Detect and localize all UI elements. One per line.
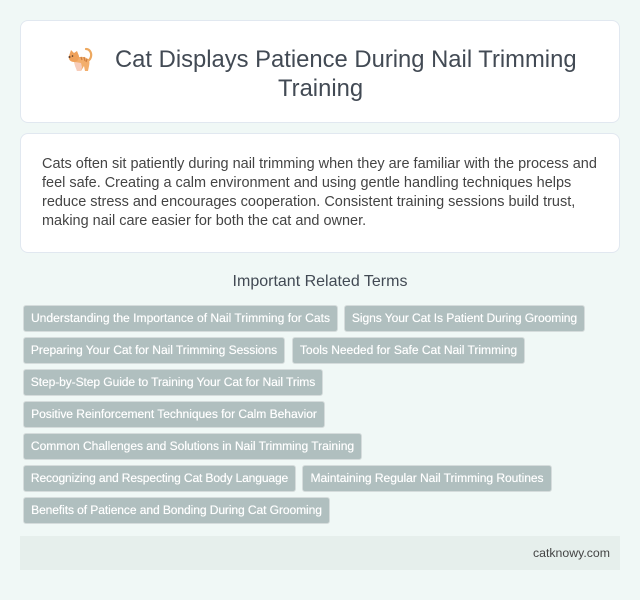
footer	[20, 536, 620, 570]
chip: Recognizing and Respecting Cat Body Language	[31, 471, 288, 485]
chip	[23, 401, 325, 428]
chip	[23, 497, 330, 524]
chip: Tools Needed for Safe Cat Nail Trimming	[300, 343, 517, 357]
chip: Common Challenges and Solutions in Nail Trimming Training	[31, 439, 354, 453]
title: Training	[278, 75, 363, 102]
panel: related term chips	[23, 305, 585, 524]
chip	[23, 369, 323, 396]
chip: Understanding the Importance of Nail Trimming for Cats	[31, 311, 330, 325]
icon: cat	[68, 48, 92, 71]
heading: related terms: Important Related Terms	[233, 273, 407, 290]
chip: Signs Your Cat Is Patient During Grooming	[352, 311, 577, 325]
panel: description	[20, 133, 620, 253]
title	[115, 46, 577, 102]
chip	[23, 337, 285, 364]
title: Cat Displays Patience During Nail Trimming	[115, 46, 577, 73]
footer: catknowy.com	[533, 546, 610, 560]
chip	[23, 465, 296, 492]
chip	[344, 305, 585, 332]
chip: Maintaining Regular Nail Trimming Routines	[310, 471, 544, 485]
text block: description	[42, 156, 597, 229]
chip	[23, 305, 338, 332]
chip: Positive Reinforcement Techniques for Calm Behavior	[31, 407, 317, 421]
text block: description: making nail care easier for both the cat and owner.	[42, 213, 366, 229]
panel: title card	[20, 20, 620, 123]
chip	[292, 337, 525, 364]
chip	[23, 433, 362, 460]
text block: description: reduce stress and encourages cooperation. Consistent training sessions build trust,	[42, 194, 575, 210]
chip: Step-by-Step Guide to Training Your Cat for Nail Trims	[31, 375, 315, 389]
chip: Preparing Your Cat for Nail Trimming Sessions	[31, 343, 277, 357]
text block: description: Cats often sit patiently during nail trimming when they are familiar with the process and	[42, 156, 597, 172]
chip	[302, 465, 552, 492]
chip: Benefits of Patience and Bonding During Cat Grooming	[31, 503, 322, 517]
text block: description: feel safe. Creating a calm environment and using gentle handling techniques helps	[42, 175, 571, 191]
